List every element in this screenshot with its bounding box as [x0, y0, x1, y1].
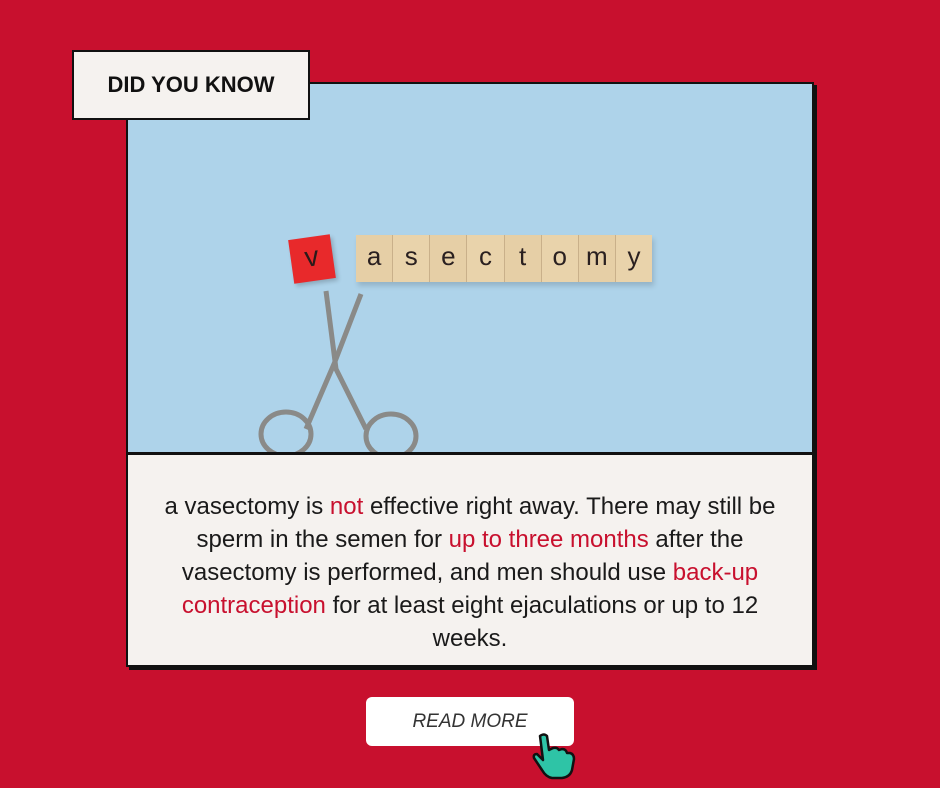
photo: vasectomy scrabble tiles and scissors — [128, 84, 812, 455]
tiles: asectomy: o — [552, 241, 567, 271]
text block: vasectomy is performed, and men should use back-up — [182, 559, 758, 586]
button: read more — [366, 697, 574, 746]
heading: DID YOU KNOW — [72, 50, 310, 120]
text block: sperm in the semen for up to three months after the — [197, 526, 743, 553]
icon: pointing hand — [532, 733, 576, 780]
main card — [126, 82, 814, 667]
button: read more: READ MORE — [412, 711, 528, 732]
tiles: asectomy: t — [519, 241, 526, 271]
heading: DID YOU KNOW: DID YOU KNOW — [107, 72, 275, 97]
tiles: asectomy: s — [405, 241, 418, 271]
icon: red tile v — [288, 234, 336, 284]
tiles: asectomy: a — [367, 241, 381, 271]
text block: weeks. — [433, 625, 507, 652]
tiles: asectomy: y — [627, 241, 640, 271]
icon: red tile v: v — [303, 240, 321, 273]
tiles: asectomy: e — [441, 241, 456, 271]
text block: a vasectomy is not effective right away. There may still be — [165, 493, 775, 520]
tiles: asectomy: m — [586, 241, 608, 271]
tiles: asectomy: c — [479, 241, 492, 271]
text block — [165, 493, 775, 652]
text block: contraception for at least eight ejaculations or up to 12 — [182, 592, 758, 619]
tiles: asectomy — [356, 235, 652, 282]
icon: scissors — [258, 290, 418, 452]
